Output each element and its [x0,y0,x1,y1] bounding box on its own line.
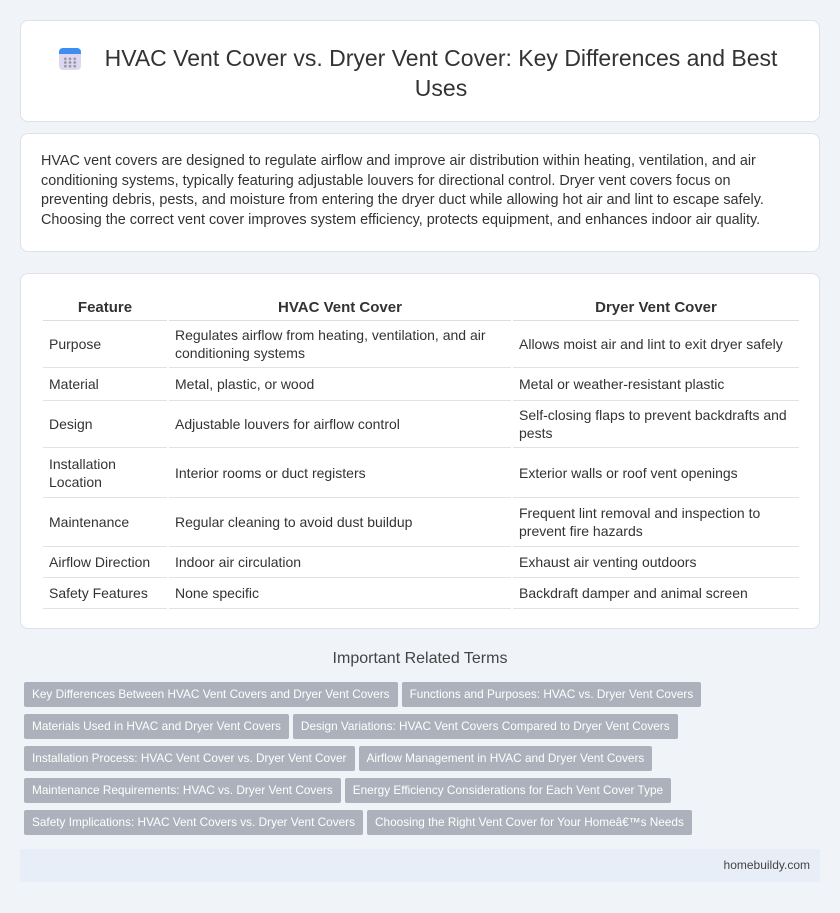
comparison table: Adjustable louvers for airflow control [175,416,400,432]
table card [20,273,820,629]
related terms tags: Design Variations: HVAC Vent Covers Compared to Dryer Vent Covers [301,719,670,733]
intro card [20,133,820,252]
comparison table: Exhaust air venting outdoors [519,554,696,570]
comparison table: Allows moist air and lint to exit dryer safely [519,336,783,352]
intro text: HVAC vent covers are designed to regulate airflow and improve air distribution within heating, ventilation, and air conditioning systems, typically featuring adjustable louvers for directional control. Dryer vent covers focus on preventing debris, pests, and moisture from entering the dryer duct while allowing hot air and lint to escape safely. Choosing the correct vent cover improves system efficiency, protects equipment, and enhances indoor air quality. [41,153,764,228]
comparison table: Regulates airflow from heating, ventilation, and air conditioning systems [175,327,486,361]
comparison table: Design [49,416,93,432]
related terms tags: Energy Efficiency Considerations for Each Vent Cover Type [353,783,663,797]
comparison table: None specific [175,585,259,601]
footer: homebuildy.com [724,858,810,872]
related terms tags: Installation Process: HVAC Vent Cover vs. Dryer Vent Cover [32,751,346,765]
comparison table: Self-closing flaps to prevent backdrafts and pests [519,407,787,441]
comparison table: Dryer Vent Cover [595,298,717,316]
comparison table: Backdraft damper and animal screen [519,585,748,601]
related terms tags: Materials Used in HVAC and Dryer Vent Covers [32,719,281,733]
comparison table: Material [49,376,99,392]
related terms tags: Airflow Management in HVAC and Dryer Vent Covers [366,751,644,765]
related terms tags: Maintenance Requirements: HVAC vs. Dryer Vent Covers [32,783,333,797]
comparison table: Metal or weather-resistant plastic [519,376,724,392]
comparison table: Interior rooms or duct registers [175,464,366,480]
comparison table: Metal, plastic, or wood [175,376,314,392]
comparison table: Exterior walls or roof vent openings [519,464,738,480]
comparison table: Feature [78,298,132,316]
comparison table: Regular cleaning to avoid dust buildup [175,514,412,530]
comparison table [43,298,799,609]
comparison table: Airflow Direction [49,554,150,570]
icon: calendar [59,48,81,70]
related terms tags: Safety Implications: HVAC Vent Covers vs. Dryer Vent Covers [32,815,355,829]
comparison table: Indoor air circulation [175,554,301,570]
comparison table: HVAC Vent Cover [278,298,402,316]
related terms tags: Functions and Purposes: HVAC vs. Dryer Vent Covers [410,687,693,701]
related terms tags: Choosing the Right Vent Cover for Your Homeâ€™s Needs [375,815,684,829]
comparison table: Frequent lint removal and inspection to prevent fire hazards [519,505,760,539]
related terms heading: Important Related Terms [333,650,507,667]
header card [20,20,820,122]
comparison table: Purpose [49,336,101,352]
comparison table: Maintenance [49,514,129,530]
title: HVAC Vent Cover vs. Dryer Vent Cover: Key Differences and Best Uses [105,45,777,101]
footer [20,849,820,882]
related terms tags [24,682,701,835]
comparison table: Safety Features [49,585,148,601]
comparison table: Installation Location [49,456,116,490]
related terms tags: Key Differences Between HVAC Vent Covers and Dryer Vent Covers [32,687,390,701]
